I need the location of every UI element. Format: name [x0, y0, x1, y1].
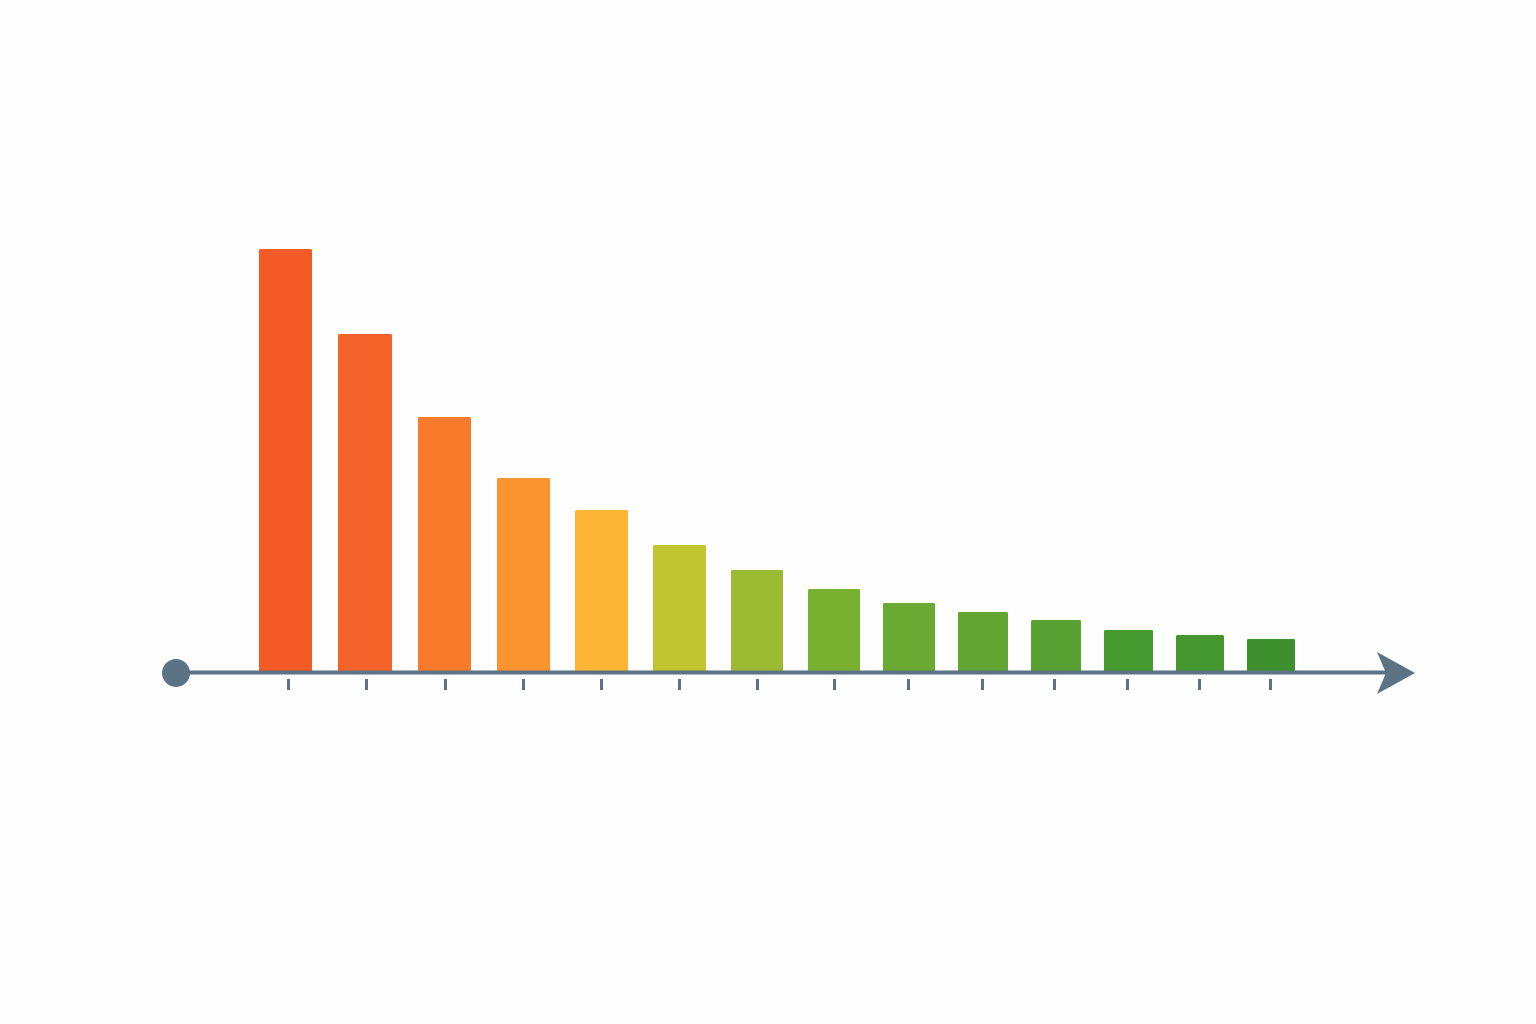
axis arrow: [162, 652, 1415, 694]
bars: [259, 249, 1295, 672]
axis ticks: [287, 679, 1272, 690]
